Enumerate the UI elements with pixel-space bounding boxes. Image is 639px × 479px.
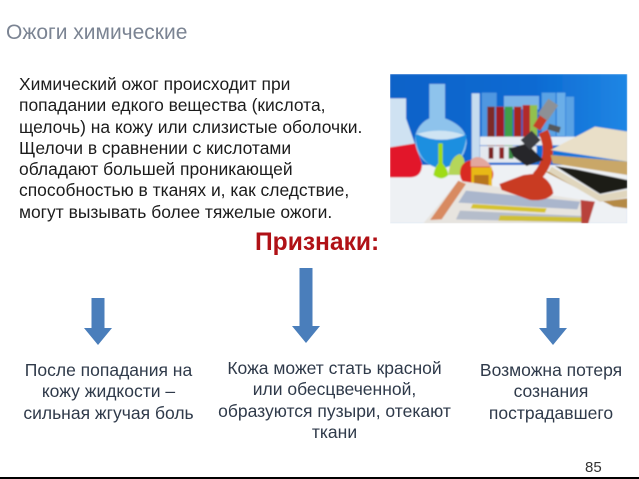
rack — [480, 137, 575, 145]
sign text: centre — [218, 358, 451, 442]
intro text block: Химический ожог происходит при — [19, 74, 290, 94]
intro text block: Щелочи в сравнении с кислотами — [19, 138, 291, 158]
sign text: left: После попадания на — [25, 360, 192, 380]
intro text block: щелочь) на кожу или слизистые оболочки. — [19, 117, 362, 137]
sign text: centre: ткани — [312, 422, 357, 442]
periodic table poster — [423, 181, 593, 223]
coloured test tubes — [487, 107, 495, 147]
flasks — [390, 97, 416, 149]
sign text: right: сознания — [514, 381, 588, 401]
page number: 85 — [585, 459, 602, 476]
sign text: centre: образуются пузыри, отекают — [218, 401, 451, 421]
microscope — [499, 173, 553, 200]
sign text: left — [23, 360, 194, 423]
sign text: right: пострадавшего — [489, 403, 613, 423]
sign text: left: кожу жидкости – — [42, 381, 175, 401]
intro text block: могут вызывать более тяжелые ожоги. — [19, 202, 332, 222]
stack of books — [551, 127, 627, 162]
sign text: left: сильная жгучая боль — [23, 403, 194, 423]
title: Ожоги химические — [6, 21, 187, 44]
intro text block: способностью в тканях и, как следствие, — [19, 180, 349, 200]
sign text: centre: или обесцвеченной, — [253, 379, 416, 399]
glass tubes behind the rack — [472, 93, 480, 160]
sign text: centre: Кожа может стать красной — [227, 358, 442, 378]
arrow: centre — [292, 268, 320, 343]
sign text: right: Возможна потеря — [480, 360, 622, 380]
bottom bar — [0, 477, 639, 479]
sign text: right — [480, 360, 622, 423]
intro text block: попадании едкого вещества (кислота, — [19, 95, 325, 115]
arrow: left — [84, 298, 112, 345]
photo: laboratory glassware and microscope — [390, 74, 628, 224]
intro text block: обладают большей проникающей — [19, 159, 293, 179]
heading: signs: Признаки: — [255, 229, 379, 256]
arrow: right — [539, 298, 567, 345]
intro text block — [19, 74, 362, 222]
